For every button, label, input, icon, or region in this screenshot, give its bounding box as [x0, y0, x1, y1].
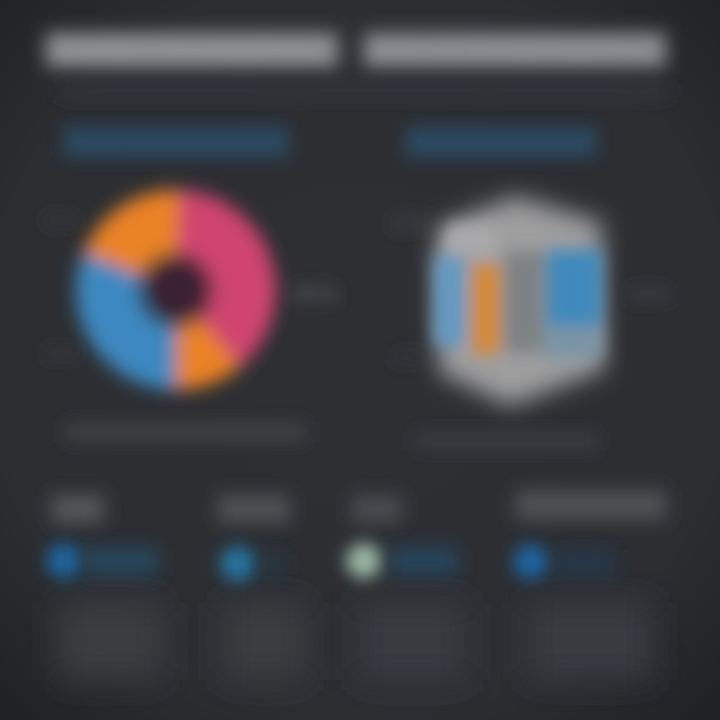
donut caption	[66, 422, 307, 443]
box labels: 12%	[390, 210, 434, 235]
column 1 label: Strategy	[84, 552, 156, 572]
column 4 text	[528, 602, 652, 680]
column 3	[346, 495, 466, 680]
column 3 icon	[346, 543, 382, 579]
column 1 label	[84, 548, 158, 576]
donut labels: 45%	[290, 281, 338, 308]
box bars	[434, 225, 602, 358]
column 2 text: Compare the trends	[226, 634, 304, 649]
donut centre	[146, 257, 210, 321]
donut labels: 25%	[44, 211, 80, 231]
donut labels	[44, 211, 338, 364]
column 4	[513, 490, 666, 680]
column 2 icon	[220, 546, 256, 582]
column 3 label: Design	[392, 552, 458, 572]
column 3 text: Test with real people	[360, 634, 464, 649]
box labels: 38%	[628, 282, 672, 307]
column 2 label	[258, 554, 284, 574]
column 1 text: Set clear goals early	[62, 608, 161, 623]
donut segment: pink	[177, 190, 276, 367]
box body	[436, 196, 604, 406]
donut segment: blue	[76, 252, 176, 390]
section heading: left	[64, 127, 288, 157]
donut labels: 30%	[44, 344, 80, 364]
column 4 heading: Measure Results	[518, 496, 664, 518]
column 3 text	[358, 602, 466, 680]
column 4 icon	[513, 544, 549, 580]
donut chart	[76, 190, 276, 390]
column 4 label	[556, 550, 614, 576]
column 1	[46, 495, 162, 680]
centre shade	[505, 252, 543, 352]
column 2	[218, 495, 306, 680]
subtitle	[60, 84, 670, 100]
column 4 heading	[516, 490, 666, 520]
column 3 heading	[352, 495, 402, 523]
title: An Infographic	[364, 35, 664, 66]
column 1 text: Review often	[62, 660, 152, 675]
column 1 text: Track every result	[62, 634, 161, 649]
column 4 text: Report on progress	[530, 608, 650, 623]
column 2 heading	[218, 495, 290, 523]
column 4 text: Plan the next step	[530, 660, 640, 675]
donut segment: orange bottom	[176, 318, 240, 390]
box caption: Year over year growth	[415, 434, 597, 451]
column 2 label: Data	[258, 559, 282, 573]
bar: orange	[472, 264, 499, 354]
column 1 text	[58, 602, 162, 680]
column 3 heading: Build	[354, 500, 400, 520]
donut segment: orange top	[83, 190, 180, 276]
subtitle: An overview of the key figures and the main points behind them	[60, 86, 670, 100]
box labels	[390, 210, 672, 368]
column 3 text: Improve the design	[360, 660, 456, 675]
column 4 text: Adjust where needed	[530, 634, 646, 649]
column 4 label: Outcome	[556, 557, 612, 573]
lower right tint	[544, 326, 602, 358]
title	[46, 33, 666, 67]
box labels: 20%	[392, 348, 428, 368]
column 1 heading: Plan	[54, 500, 104, 520]
box left face highlight	[447, 225, 495, 255]
column 2 text: Collect the numbers	[226, 608, 304, 623]
column 3 text: Draft the first version	[360, 608, 464, 623]
column 1 heading	[52, 495, 104, 523]
column 2 heading: Research	[220, 500, 290, 520]
column 3 label	[390, 548, 458, 576]
bar: left blue	[434, 256, 464, 346]
bar: right blue	[546, 250, 602, 326]
title: Data Insights:	[48, 35, 338, 66]
3D box chart	[434, 196, 604, 406]
column 1 icon	[46, 543, 82, 579]
donut caption: Share of total by category	[66, 426, 307, 443]
section heading: left: Market Share	[66, 129, 286, 156]
column 2 text: Share the findings	[226, 660, 298, 675]
section heading: right: Growth Model	[408, 129, 595, 156]
column 2 text	[224, 602, 306, 680]
